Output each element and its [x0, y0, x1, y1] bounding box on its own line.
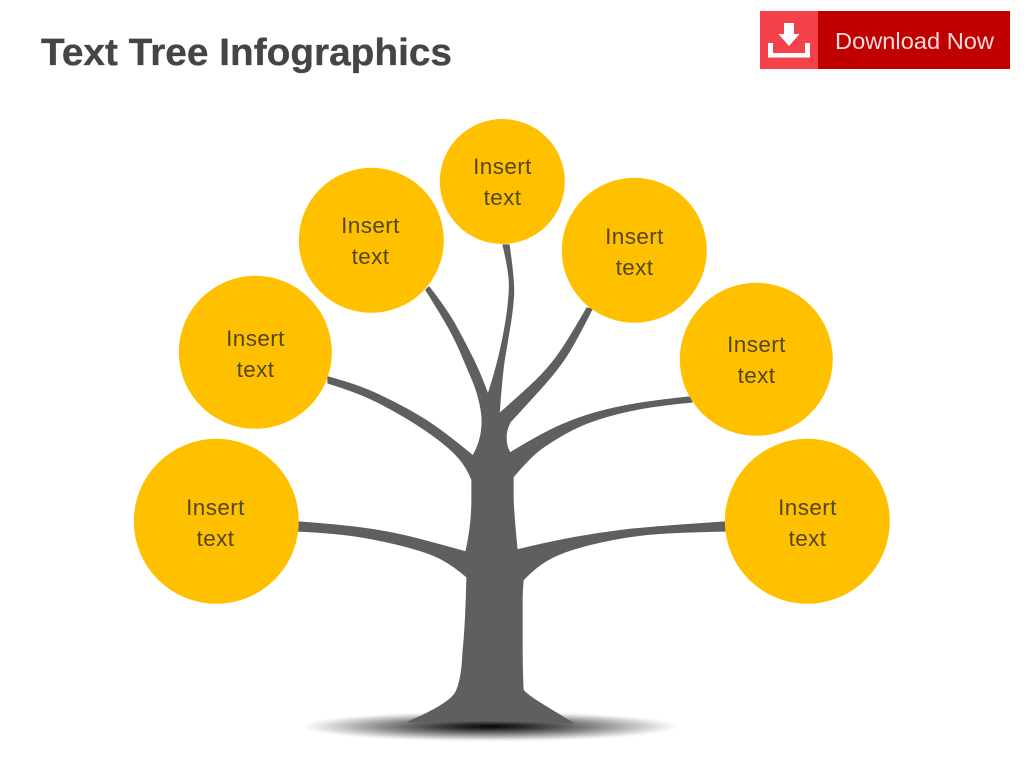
download button: [760, 11, 1010, 69]
icon: download arrow: [768, 23, 810, 58]
circle: top: [440, 119, 565, 244]
circle: left 1: Insert: [186, 495, 245, 520]
circle: right 3: [562, 178, 707, 323]
circle: top: text: [484, 185, 522, 210]
button label: Download Now: [835, 28, 994, 54]
circle: left 3: [299, 168, 444, 313]
circle: left 2: Insert: [226, 326, 285, 351]
title: Text Tree Infographics: [41, 32, 452, 74]
circle: left 1: text: [197, 526, 235, 551]
circle: right 2: text: [738, 363, 776, 388]
circle: left 2: [179, 276, 332, 429]
tree trunk and branches: [298, 245, 726, 723]
circle: right 1: text: [789, 526, 827, 551]
ground shadow: [302, 712, 678, 741]
circle: left 3: Insert: [341, 213, 400, 238]
circle: right 1: Insert: [778, 495, 837, 520]
circle: right 3: Insert: [605, 224, 664, 249]
circle: right 1: [725, 439, 890, 604]
circle: left 3: text: [352, 244, 390, 269]
circle: right 2: Insert: [727, 332, 786, 357]
circle: left 2: text: [237, 357, 275, 382]
circle: right 3: text: [616, 255, 654, 280]
circle: left 1: [134, 439, 299, 604]
circle: right 2: [680, 283, 833, 436]
circle: top: Insert: [473, 154, 532, 179]
